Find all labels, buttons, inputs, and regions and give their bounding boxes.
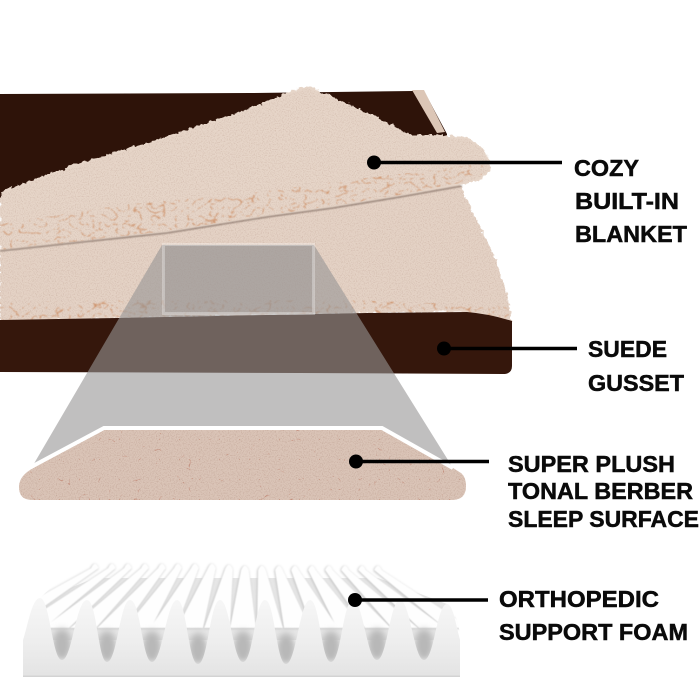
- bed top: brown suede: [0, 91, 447, 200]
- panel: bed with blanket: [0, 86, 512, 374]
- callout: cozy built-in blanket: COZY: [574, 155, 639, 181]
- callout: cozy built-in blanket: BUILT-IN: [575, 188, 679, 214]
- panel: sleep surface cross-section: [19, 428, 466, 500]
- sleep surface under blanket: [0, 184, 512, 322]
- shadow under blanket fold: [0, 186, 462, 251]
- foam valley shadows: [52, 629, 434, 665]
- white highlight edge: [31, 428, 453, 468]
- foam body behind ridges: [30, 578, 460, 640]
- callout: super plush sleep surface: SUPER PLUSH: [508, 451, 675, 477]
- callout: suede gusset: GUSSET: [588, 370, 684, 396]
- callout: super plush sleep surface: TONAL BERBER: [508, 478, 693, 504]
- callout: orthopedic support foam: SUPPORT FOAM: [499, 619, 688, 645]
- foam ridges running to the back: [0, 564, 471, 628]
- callout: super plush sleep surface: SLEEP SURFACE: [508, 506, 699, 532]
- beige rear edge strip: [412, 90, 445, 133]
- callout: cozy built-in blanket: [367, 155, 687, 247]
- callout: orthopedic support foam: [348, 586, 688, 645]
- panel: orthopedic egg-crate foam: [0, 564, 471, 677]
- suede gusset: [0, 312, 512, 374]
- callout: suede gusset: [437, 336, 684, 396]
- zoom projection: gray trapezoid: [32, 245, 453, 468]
- foam front row: [23, 598, 460, 677]
- zoom window on the surface: [164, 244, 314, 314]
- callout: super plush sleep surface: [349, 451, 699, 532]
- callout: suede gusset: SUEDE: [588, 336, 667, 362]
- callout: orthopedic support foam: ORTHOPEDIC: [499, 586, 659, 612]
- cozy blanket fold: [0, 86, 492, 252]
- callout: cozy built-in blanket: BLANKET: [575, 221, 687, 247]
